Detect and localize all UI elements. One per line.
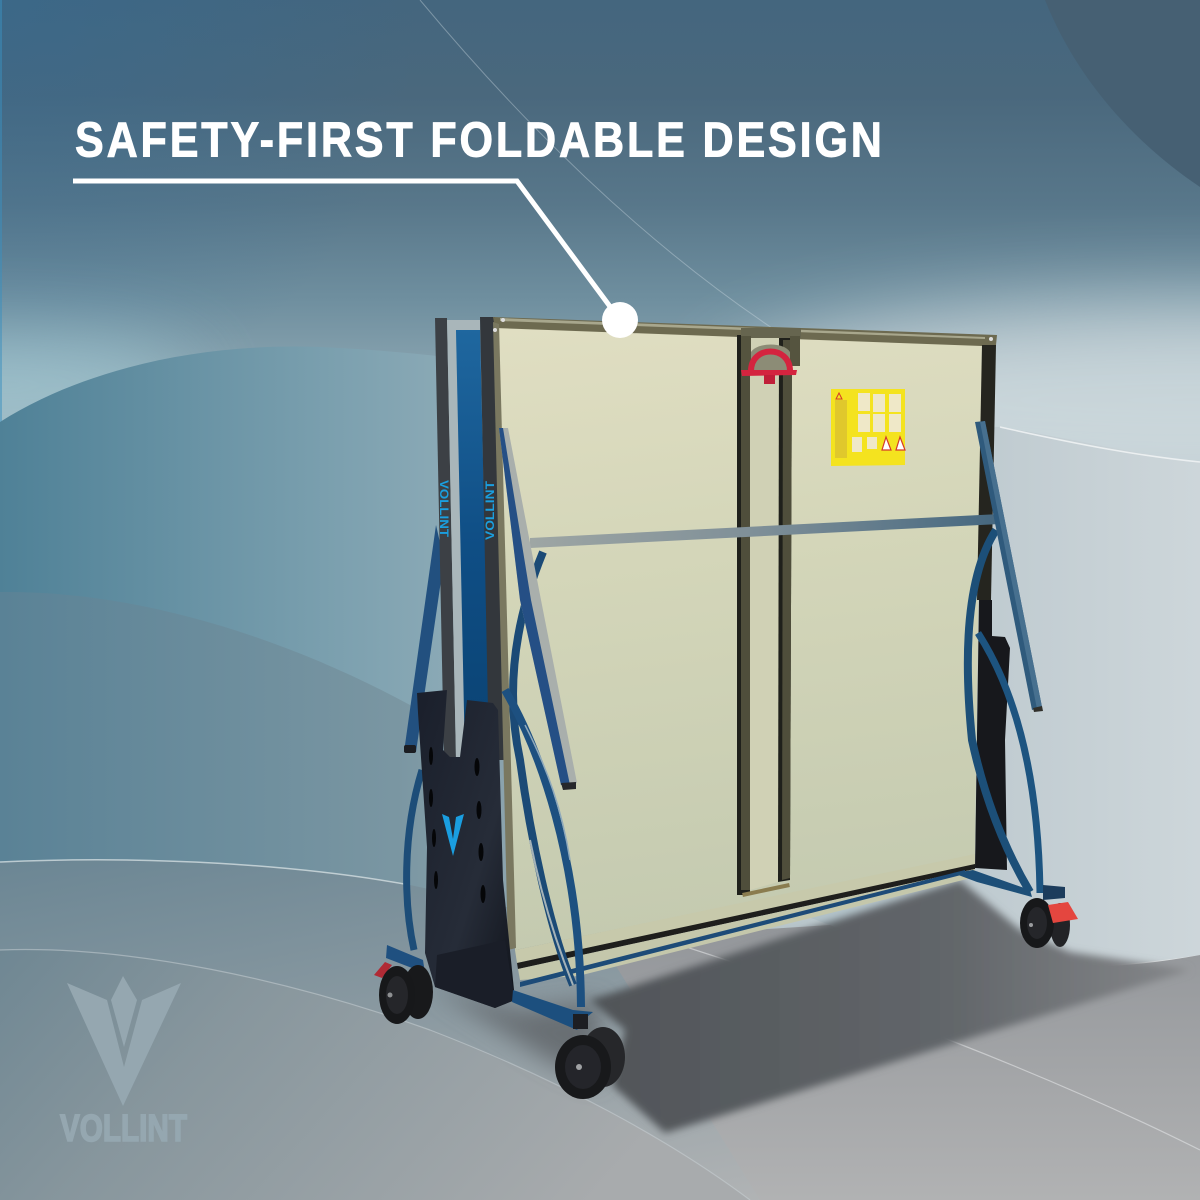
heading: safety-first foldable design: SAFETY-FIRST FOLDABLE DESIGN xyxy=(75,112,882,167)
table top underside panel xyxy=(495,326,982,950)
icon: red folding handle xyxy=(741,352,797,384)
blue base bars xyxy=(386,870,1065,1030)
table frame top rail and right rail xyxy=(493,317,997,950)
icon: V emblem xyxy=(67,976,181,1106)
black plastic side support with blue logo xyxy=(417,690,515,1008)
brand logo xyxy=(60,976,187,1150)
icon: blue V logo on support xyxy=(442,814,464,856)
table edge brand text rear: VOLLINT xyxy=(483,480,497,540)
central hinge rails xyxy=(737,328,801,895)
rear left leg xyxy=(404,525,444,950)
folding legs and crossbar xyxy=(499,421,1043,1007)
brand name: VOLLINT xyxy=(60,1108,187,1150)
callout leader line and marker xyxy=(73,181,638,338)
front wheels xyxy=(555,1027,625,1099)
yellow safety instruction sticker xyxy=(831,389,905,466)
table edge brand text: VOLLINT xyxy=(437,480,451,538)
right wheels and red brake pedal xyxy=(1020,898,1078,948)
folded table tennis table xyxy=(374,317,1078,1099)
folding side frame with blue playing surface xyxy=(435,317,504,760)
rear-left wheels xyxy=(374,962,433,1024)
rear right frame block xyxy=(975,600,1010,870)
table bottom edge rails xyxy=(515,854,975,987)
table floor shadow xyxy=(430,880,1190,1133)
